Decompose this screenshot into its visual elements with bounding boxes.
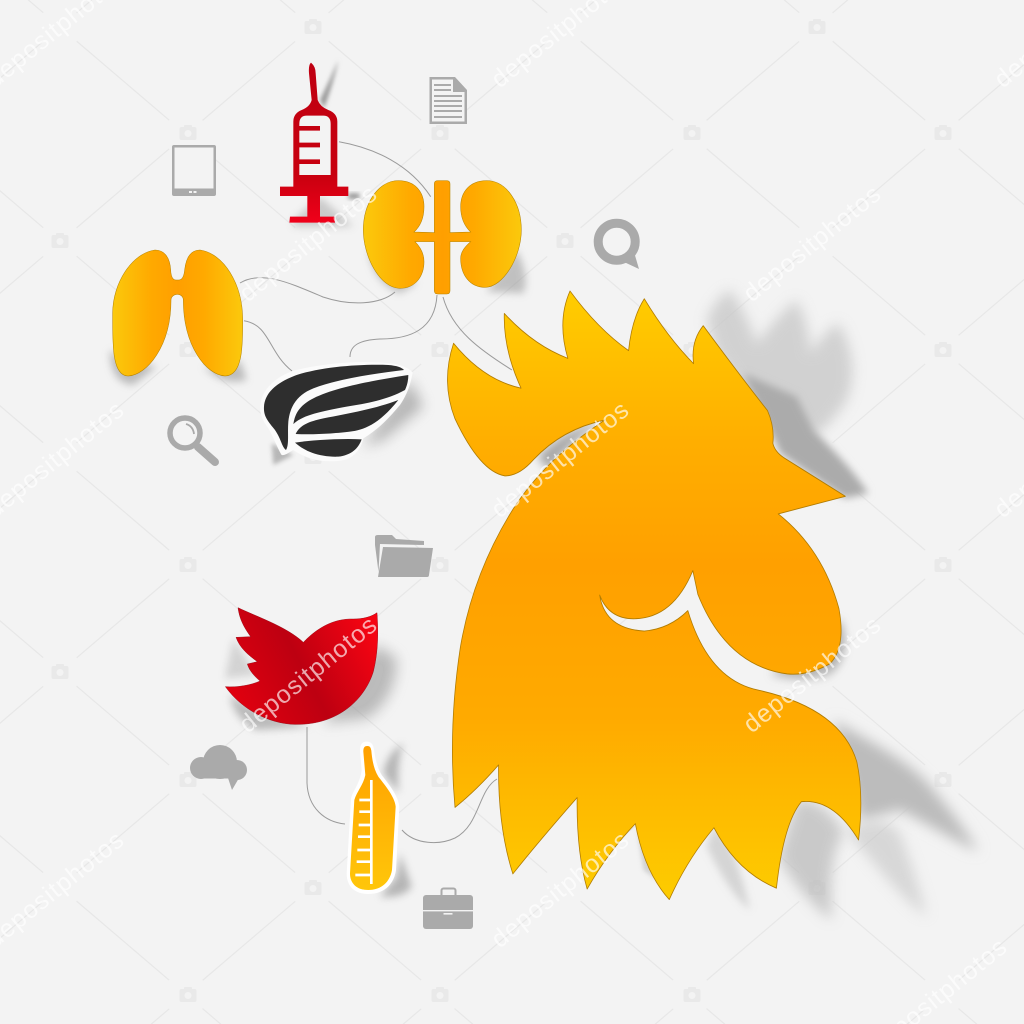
rooster silhouette <box>447 291 861 900</box>
wing sticker border <box>260 362 413 461</box>
icon: bird <box>225 608 397 730</box>
icon: briefcase <box>423 888 473 929</box>
icon: cloud <box>190 745 247 790</box>
icon: wing <box>260 362 423 465</box>
thermometer sticker border <box>347 742 399 894</box>
rooster comb shadow <box>707 290 868 498</box>
kidneys shadow <box>368 250 526 293</box>
syringe shadow <box>293 60 359 227</box>
icon: magnifier <box>170 418 215 462</box>
icon: folder <box>375 535 433 577</box>
watermark text: depositphotos <box>738 180 886 308</box>
bird shadow <box>225 638 397 730</box>
watermark text: depositphotos <box>486 826 634 954</box>
lungs shadow <box>110 350 247 385</box>
thermometer shadow <box>380 743 412 897</box>
watermark text: depositphotos <box>234 611 382 739</box>
thermometer body <box>350 746 396 890</box>
rooster head sticker <box>447 291 861 900</box>
icon: syringe <box>280 60 359 227</box>
icon: kidneys <box>363 181 526 294</box>
icon: thermometer <box>347 742 412 897</box>
connector lines <box>240 142 512 843</box>
icon: search bubble <box>598 223 639 269</box>
syringe body <box>280 63 348 223</box>
rooster inner shadows <box>537 420 845 679</box>
watermark text: depositphotos <box>486 396 634 524</box>
kidneys shape <box>363 181 521 294</box>
icon: lungs <box>110 250 247 385</box>
watermark text: depositphotos <box>738 611 886 739</box>
thermometer scale <box>355 780 371 884</box>
watermark text: depositphotos <box>234 180 382 308</box>
rooster hackle shadow <box>637 720 978 920</box>
icon: document <box>430 77 467 124</box>
bird silhouette <box>225 608 378 724</box>
wing shadow <box>272 380 423 465</box>
lungs shape <box>113 250 243 376</box>
wing feathers <box>264 365 408 457</box>
icon: tablet <box>172 145 216 196</box>
